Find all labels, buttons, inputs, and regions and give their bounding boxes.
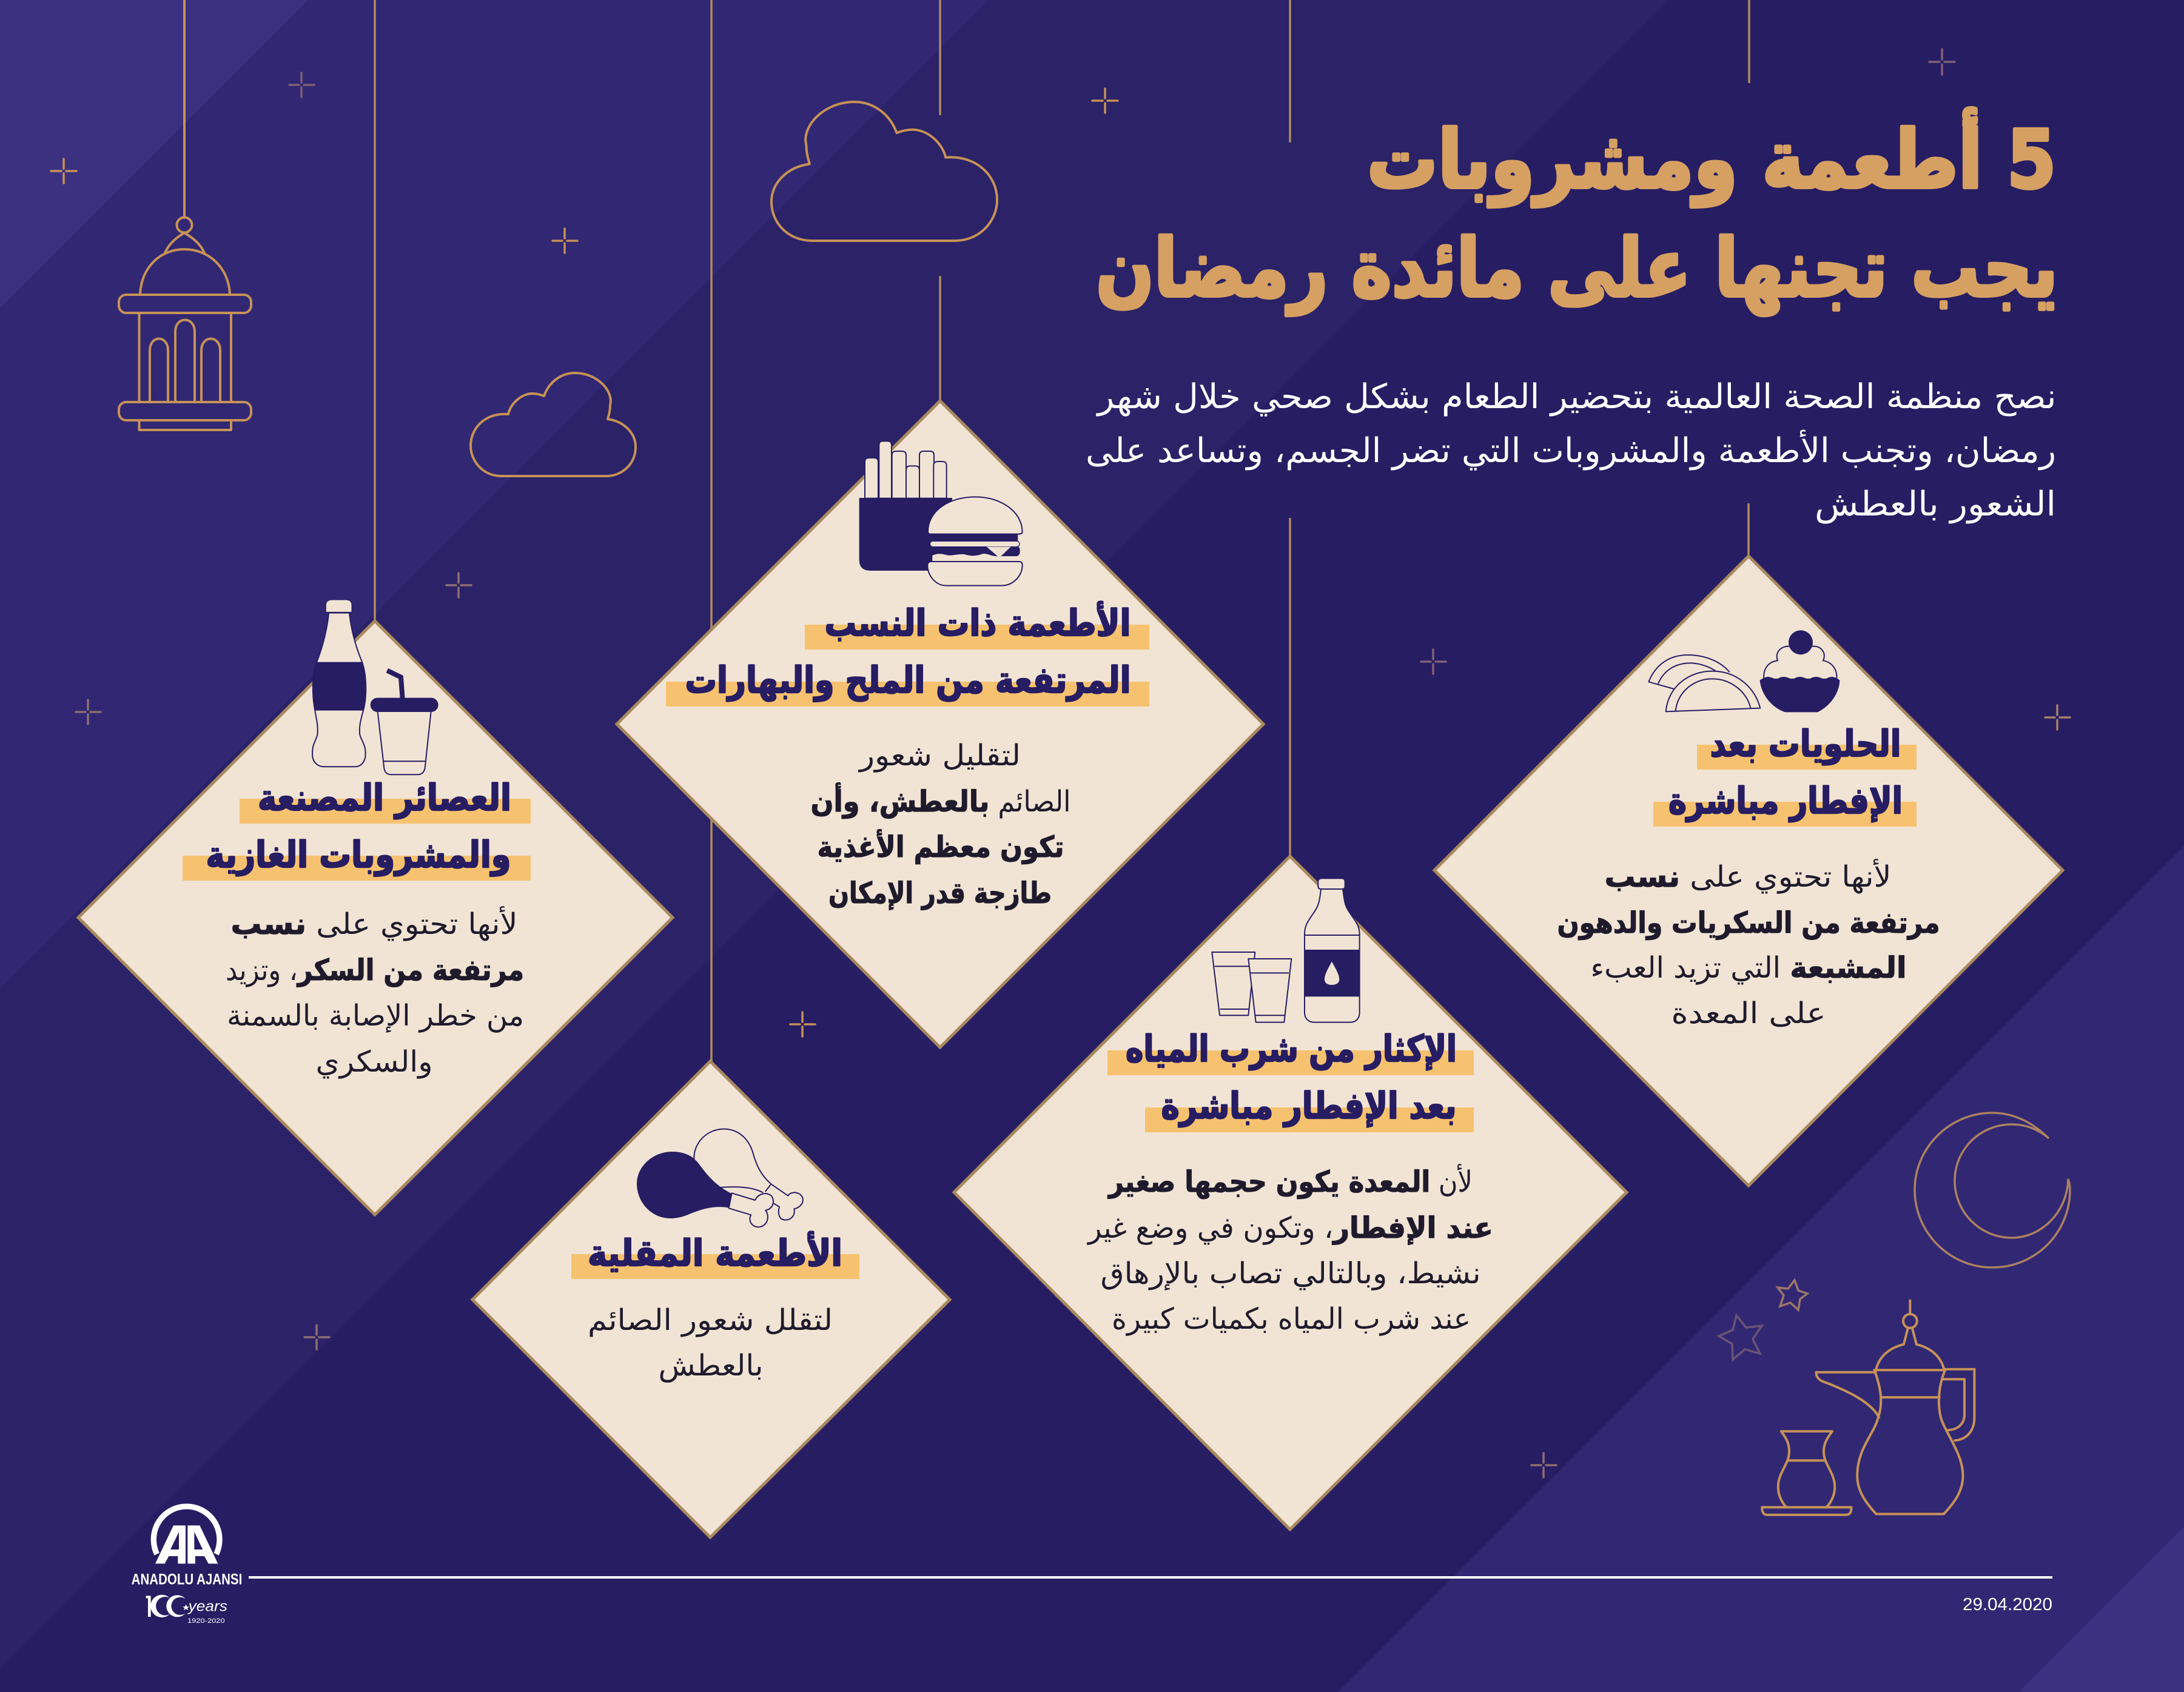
heading: drinking water: بعد الإفطار مباشرة [1161,1085,1457,1127]
icon: small cloud [471,373,636,476]
heading highlight line 1 [1107,1050,1474,1075]
panel: sweets after iftar [1434,556,2063,1186]
heading: juices and soft drinks: العصائر المصنعة [258,777,511,819]
title: 5 أطعمة ومشروبات [1367,108,2056,207]
panel: juices and soft drinks [78,600,673,1215]
body text: water: نشيط، وبالتالي تصاب بالإرهاق [1100,1257,1481,1291]
body text: fried foods [588,1303,833,1383]
icon: chicken drumsticks [637,1129,803,1227]
body text: salty foods: تكون معظم الأغذية [818,829,1064,864]
body text: salty foods: طازجة قدر الإمكان [828,876,1052,910]
heading highlight line 1 [1697,745,1917,770]
logo: Anadolu Agency: years [187,1599,227,1615]
icon: crescent moon [1915,1113,2070,1267]
body text: sweets [1557,858,1940,1030]
intro text [1086,377,2056,524]
body text: sweets: مرتفعة من السكريات والدهون [1557,906,1940,940]
body text: juices: مرتفعة من السكر، وتزيد [226,953,524,987]
body text: juices [226,905,524,1079]
panel: water after iftar [954,856,1627,1529]
heading highlight line 2 [1653,802,1917,827]
body text: sweets: على المعدة [1672,996,1826,1030]
icon: qatayef and cupcake [1648,630,1840,712]
panel: fried foods [472,1061,950,1537]
intro text: الشعور بالعطش [1815,485,2056,524]
intro text: نصح منظمة الصحة العالمية بتحضير الطعام بشكل صحي خلال شهر [1095,377,2056,417]
hanging strings [375,0,1749,1061]
heading highlight [571,1254,859,1279]
heading: sweets [1668,723,1903,822]
body text: sweets: لأنها تحتوي على نسب [1605,858,1891,894]
body text: sweets: المشبعة التي تزيد العبء [1591,951,1907,985]
body text: water: عند الإفطار، وتكون في وضع غير [1087,1211,1493,1245]
body text: water: لأن المعدة يكون حجمها صغير [1107,1163,1473,1199]
icon: fries and burger [859,441,1023,586]
body text: water: عند شرب المياه بكميات كبيرة [1112,1302,1471,1336]
logo: Anadolu Agency: ANADOLU AJANSI [132,1571,242,1588]
body text: salty foods [810,739,1071,910]
icon: soda bottle and cup [312,600,438,774]
icon: coffee pot and tea glass [1762,1300,1974,1515]
heading: sweets: الحلويات بعد [1710,723,1901,765]
icon: small star [1778,1280,1807,1310]
title [1096,108,2058,316]
logo: Anadolu Agency: 1920-2020 [187,1617,225,1625]
sparkle crosses [51,49,2070,1477]
heading highlight line 2 [666,682,1149,707]
body text: water [1087,1163,1493,1336]
heading highlight line 1 [805,625,1149,650]
heading: juices and soft drinks [206,777,511,876]
icon: large star [1719,1315,1762,1360]
heading highlight line 2 [1145,1107,1474,1132]
icon: hanging lantern [119,0,251,430]
body text: juices: والسكري [315,1045,433,1079]
body text: salty foods: لتقليل شعور [858,739,1021,773]
logo: Anadolu Agency [132,1506,242,1625]
heading: drinking water: الإكثار من شرب المياه [1126,1028,1457,1070]
heading: salty and spicy foods: الأطعمة ذات النسب [825,601,1131,645]
heading: salty and spicy foods [685,601,1131,702]
icon: water bottle and glasses [1212,878,1360,1022]
body text: fried foods: لتقلل شعور الصائم [588,1303,833,1337]
body text: juices: لأنها تحتوي على نسب [230,905,518,941]
panel: salty and spicy foods [617,401,1263,1047]
heading: drinking water [1126,1028,1457,1127]
icon: large cloud [771,102,997,241]
body text: juices: من خطر الإصابة بالسمنة [227,999,524,1033]
heading highlight line 1 [240,799,531,824]
body text: fried foods: بالعطش [659,1349,763,1383]
heading: fried foods: الأطعمة المقلية [588,1231,842,1275]
body text: salty foods: الصائم بالعطش، وأن [810,782,1071,819]
date: 29.04.2020 [1963,1595,2052,1614]
heading highlight line 2 [183,856,531,881]
heading: juices and soft drinks: والمشروبات الغازية [206,834,511,876]
footer rule [249,1576,2052,1579]
intro text: رمضان، وتجنب الأطعمة والمشروبات التي تضر الجسم، وتساعد على [1086,429,2056,471]
heading: sweets: الإفطار مباشرة [1668,780,1903,822]
heading: salty and spicy foods: المرتفعة من الملح والبهارات [685,659,1131,702]
